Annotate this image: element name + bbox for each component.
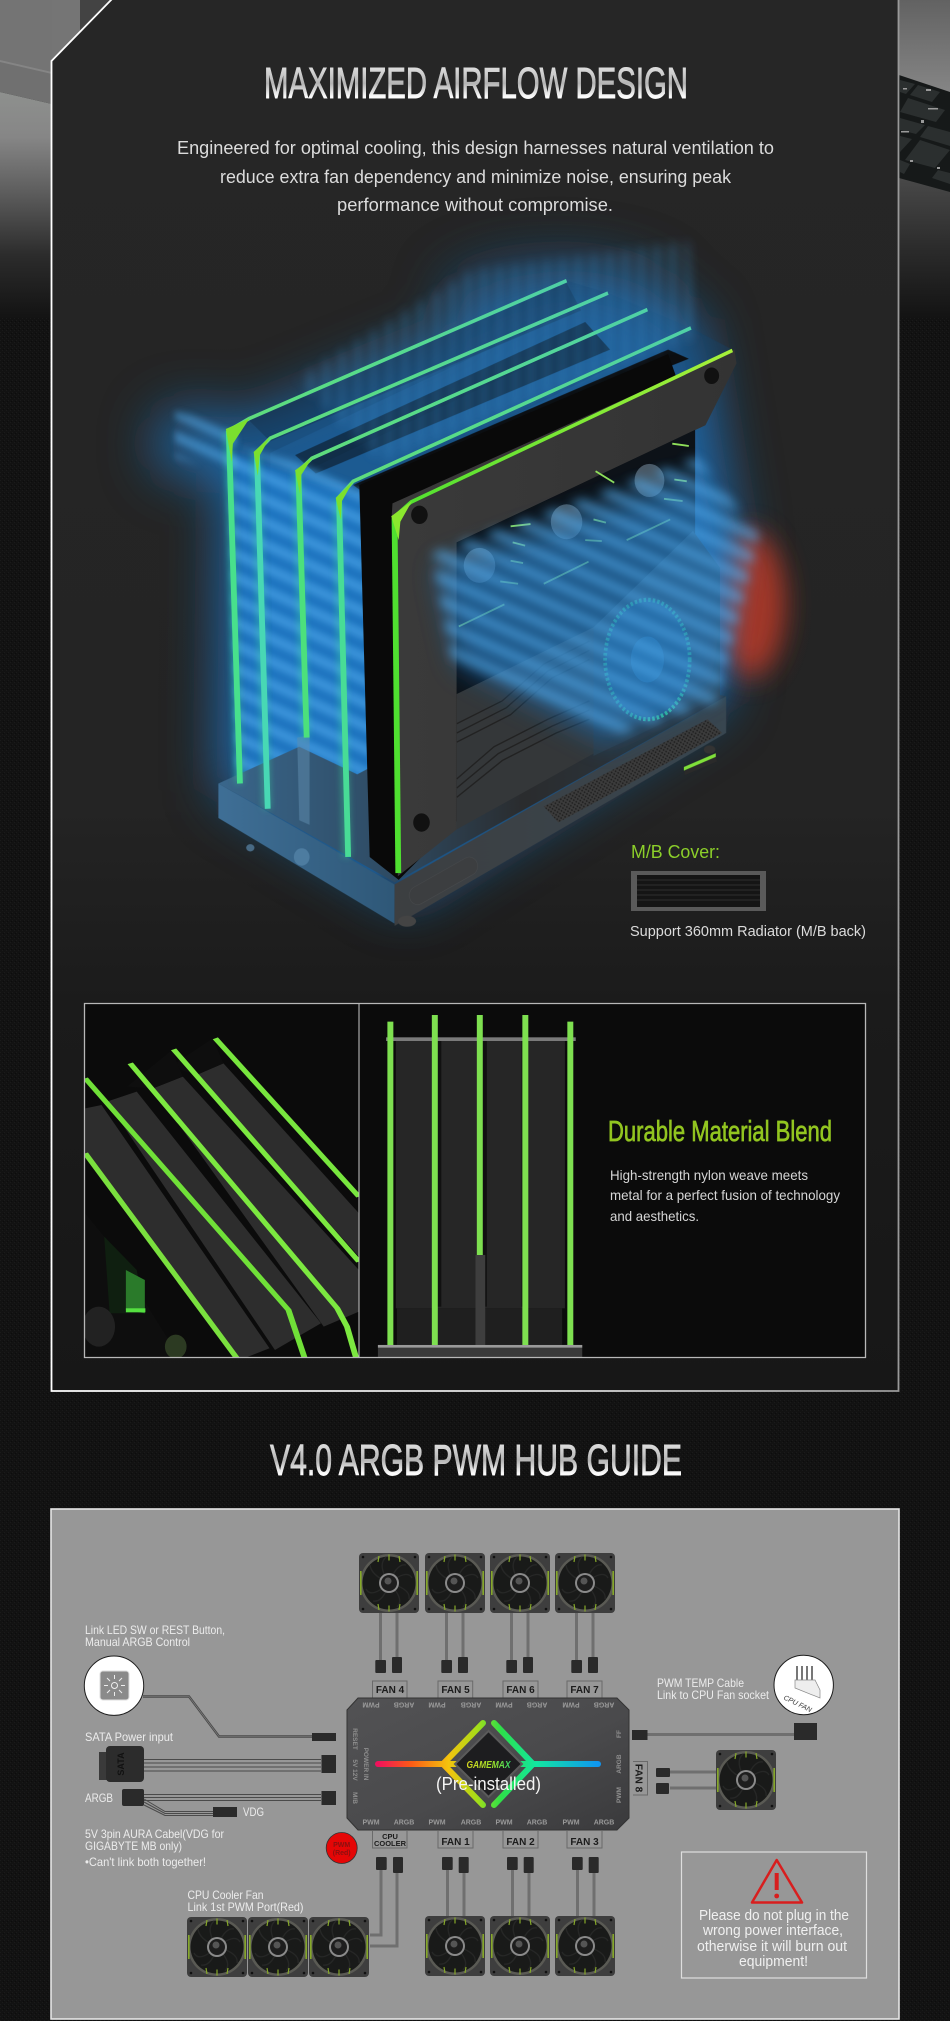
label: ARGB: ARGB — [85, 1792, 113, 1805]
note: AURA cable: 5V 3pin AURA Cabel(VDG for — [85, 1828, 224, 1841]
text block: airflow description: reduce extra fan dependency and minimize noise, ensuring peak — [220, 167, 732, 187]
warning text: otherwise it will burn out — [697, 1938, 848, 1955]
front corner highlight — [391, 501, 412, 540]
ARGB plug — [122, 1789, 144, 1806]
window green accents — [459, 444, 689, 626]
icon: CPU fan header — [774, 1655, 833, 1715]
badge: PWM red — [326, 1832, 357, 1864]
top fans with cables — [359, 1553, 615, 1673]
heading: durable material blend: Durable Material Blend — [608, 1116, 832, 1148]
logo text: GAMEMAX — [466, 1759, 511, 1771]
text block: airflow description — [177, 138, 774, 215]
photo: vertical panels front view — [378, 1015, 582, 1359]
port labels top (inverted): ARGB — [394, 1700, 414, 1708]
fan 8 label: FAN 8 — [632, 1764, 644, 1793]
icon: CPU fan header: CPU FAN — [782, 1695, 813, 1715]
port labels top (inverted): PWM — [362, 1700, 380, 1708]
fan port names: FAN 5 — [441, 1685, 470, 1696]
port labels top (inverted): PWM — [562, 1700, 580, 1708]
connector: board side — [794, 1723, 817, 1740]
rear green strips — [228, 281, 691, 499]
hub board — [347, 1698, 629, 1830]
port labels bottom: ARGB — [461, 1820, 481, 1826]
port labels bottom: PWM — [495, 1820, 513, 1826]
SATA connector — [322, 1755, 336, 1773]
illustration: open-frame case with airflow — [150, 242, 786, 927]
hub label brackets — [372, 1681, 602, 1848]
rear strip glow — [228, 431, 347, 857]
note: CPU cooler fan — [188, 1889, 304, 1914]
fan port names: FAN 3 — [570, 1837, 599, 1848]
panel: hub wiring guide — [51, 1509, 899, 2019]
text block: airflow description: Engineered for optimal cooling, this design harnesses natural ventilation to — [177, 138, 774, 158]
port labels sides: RESET — [351, 1728, 358, 1750]
port labels top (inverted): PWM — [495, 1700, 513, 1708]
ARGB input — [85, 1789, 336, 1819]
port labels sides: FF — [616, 1730, 623, 1738]
front green strip — [393, 350, 732, 518]
cooling fans in window — [464, 464, 664, 583]
fan 8 with cables — [656, 1750, 776, 1810]
label: LED switch: Link LED SW or REST Button, — [85, 1624, 225, 1637]
connector — [312, 1733, 336, 1741]
photo: angled panels close-up — [83, 1038, 359, 1360]
warning text: Please do not plug in the — [699, 1907, 849, 1924]
PWM temp cable callout — [632, 1655, 833, 1740]
label: VDG: VDG — [243, 1806, 264, 1819]
heading: hub guide: V4.0 ARGB PWM HUB GUIDE — [270, 1436, 682, 1485]
cable: PWM temp — [647, 1733, 795, 1736]
port labels bottom: ARGB — [527, 1820, 547, 1826]
SATA plug — [99, 1746, 144, 1782]
black chassis body — [359, 354, 695, 880]
port labels top (inverted): ARGB — [594, 1700, 614, 1708]
note: AURA cable: GIGABYTE MB only) — [85, 1840, 182, 1853]
badge: PWM red: (Red) — [333, 1850, 351, 1857]
port labels bottom: ARGB — [394, 1820, 414, 1826]
device detail — [85, 1237, 186, 1357]
fan port names: FAN 4 — [376, 1685, 405, 1696]
note: CPU cooler fan: CPU Cooler Fan — [188, 1889, 264, 1902]
label: radiator support: Support 360mm Radiator (M/B back) — [630, 923, 866, 940]
port labels sides — [351, 1728, 623, 1804]
port labels sides: PWM — [616, 1787, 623, 1803]
airflow streaks left — [229, 444, 382, 866]
SATA plug: SATA — [116, 1752, 126, 1776]
blue airflow overlay on interior — [436, 480, 743, 742]
label: LED switch: Manual ARGB Control — [85, 1636, 190, 1649]
warning text: equipment! — [739, 1953, 808, 1970]
fan port names — [374, 1685, 599, 1848]
icon: warning triangle — [752, 1860, 802, 1902]
blue glow — [150, 260, 739, 903]
port labels bottom: PWM — [562, 1820, 580, 1826]
port labels sides: ARGB — [616, 1754, 623, 1774]
fan port names: COOLER — [374, 1839, 407, 1848]
port labels top (inverted): PWM — [428, 1700, 446, 1708]
note: CPU cooler fan: Link 1st PWM Port(Red) — [188, 1901, 304, 1914]
port labels bottom: ARGB — [594, 1820, 614, 1826]
fan port names: FAN 2 — [506, 1837, 535, 1848]
label: PWM temp: PWM TEMP Cable — [657, 1677, 744, 1690]
SATA power input — [85, 1731, 336, 1782]
port labels bottom: PWM — [428, 1820, 446, 1826]
note: AURA cable: •Can't link both together! — [85, 1856, 206, 1869]
port labels top (inverted) — [362, 1700, 614, 1708]
base platform — [218, 664, 726, 927]
red exhaust glow — [716, 531, 786, 678]
VDG connector — [213, 1807, 237, 1817]
rear vertical strips — [229, 431, 348, 857]
interior upper window — [457, 430, 695, 694]
cpu cooler fans — [187, 1857, 403, 1977]
label: LED switch — [85, 1624, 225, 1649]
logo diamond — [455, 1731, 522, 1797]
port labels sides: M/B — [351, 1792, 358, 1804]
corner highlights — [226, 418, 353, 519]
text block: material description: metal for a perfect fusion of technology — [610, 1187, 840, 1203]
port labels top (inverted): ARGB — [461, 1700, 481, 1708]
warning text: wrong power interface, — [702, 1922, 843, 1939]
fourth rear edge glow — [297, 735, 310, 825]
connector: hub side — [632, 1730, 648, 1740]
port labels bottom: PWM — [362, 1820, 380, 1826]
SATA wires — [144, 1760, 321, 1771]
heading: maximized airflow design: MAXIMIZED AIRFLOW DESIGN — [264, 59, 688, 108]
warning box — [682, 1852, 866, 1978]
rear panels — [227, 281, 732, 880]
PSU housing with fan — [594, 531, 720, 756]
text block: material description: and aesthetics. — [610, 1208, 699, 1224]
callout: M/B cover — [630, 842, 866, 940]
label: SATA power: SATA Power input — [85, 1731, 174, 1744]
background photo: right strip with keyboard — [899, 0, 950, 318]
warning text — [697, 1907, 849, 1970]
background photo: left strip — [0, 0, 113, 318]
fan port names: FAN 7 — [570, 1685, 599, 1696]
port labels bottom — [362, 1820, 614, 1826]
blue fill between rear panels — [231, 453, 382, 875]
label: M/B Cover: M/B Cover: — [631, 842, 720, 862]
label: PWM temp — [657, 1677, 770, 1702]
fan 8 label — [632, 1762, 648, 1795]
panel: durable material blend — [83, 1004, 865, 1360]
pre-installed note: (Pre-installed) — [436, 1774, 541, 1794]
radiator thumbnail — [631, 871, 766, 911]
LED switch callout — [84, 1624, 336, 1741]
badge: PWM red: PWM — [333, 1842, 350, 1849]
fan port names: CPU — [382, 1832, 398, 1841]
thumb screws — [411, 367, 719, 832]
rgb light bar — [378, 1723, 598, 1805]
lower cover with circuit pattern — [457, 627, 594, 829]
bottom fans with cables — [425, 1857, 615, 1976]
text block: material description — [610, 1167, 840, 1224]
label: PWM temp: Link to CPU Fan socket — [657, 1689, 770, 1702]
panel: maximized airflow design — [52, 0, 898, 1391]
note: AURA cable — [85, 1828, 224, 1869]
port labels sides: POWER IN — [362, 1748, 369, 1781]
fan port names: FAN 1 — [441, 1837, 470, 1848]
ARGB connector — [322, 1791, 336, 1805]
text block: airflow description: performance without compromise. — [337, 195, 613, 215]
airflow vertical streaks top — [295, 242, 693, 462]
front frame — [392, 350, 737, 876]
icon: LED button — [84, 1656, 144, 1715]
cable: LED switch — [143, 1696, 313, 1736]
port labels top (inverted): ARGB — [527, 1700, 547, 1708]
ARGB wires — [144, 1794, 321, 1816]
text block: material description: High-strength nylon weave meets — [610, 1167, 808, 1183]
fan port names: FAN 6 — [506, 1685, 535, 1696]
front vertical strip — [395, 518, 398, 873]
port labels sides: 5V 12V — [351, 1759, 358, 1781]
